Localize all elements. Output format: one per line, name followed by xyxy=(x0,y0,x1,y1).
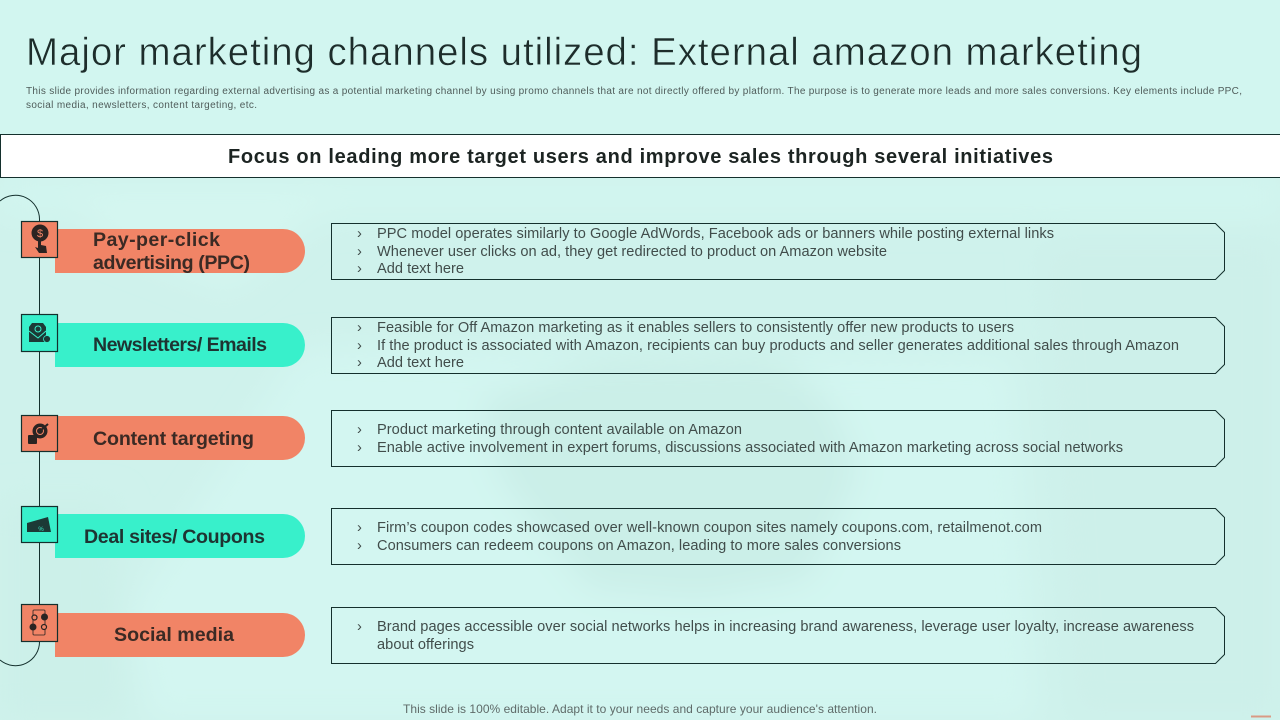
text box: Content targeting: › xyxy=(357,422,362,438)
text box: Newsletters: If the product is associated with Amazon, recipients can buy products and seller generates additional sales through Amazon xyxy=(377,338,1179,354)
icon: target with dart xyxy=(22,416,58,452)
pill: Deal sites xyxy=(55,514,305,558)
text box: Content targeting: › xyxy=(357,440,362,456)
text box: Newsletters: › xyxy=(357,355,362,371)
description: This slide provides information regarding external advertising as a potential marketing channel by using promo channels that are not directly offered by platform. The purpose is to generate more leads and more sales conversions. Key elements include PPC, xyxy=(26,86,1242,97)
text box: Social media xyxy=(332,608,1224,664)
text box: Newsletters: › xyxy=(357,338,362,354)
text box: Content targeting: Product marketing through content available on Amazon xyxy=(377,422,742,438)
description: social media, newsletters, content targeting, etc. xyxy=(26,100,257,111)
pill: PPC xyxy=(55,229,305,274)
text box: Newsletters xyxy=(332,318,1224,374)
pill: Social media xyxy=(55,613,305,657)
pill: Content targeting: Content targeting xyxy=(93,428,254,450)
text box: PPC: › xyxy=(357,261,362,277)
icon: dollar coin and pointing hand xyxy=(22,222,58,258)
text box: Deal sites: Firm’s coupon codes showcased over well-known coupon sites namely coupons.com, retailmenot.com xyxy=(377,520,1042,536)
pill: Social media: Social media xyxy=(114,624,235,646)
text box: PPC: Whenever user clicks on ad, they get redirected to product on Amazon website xyxy=(377,244,887,260)
pill: PPC: Pay-per-click xyxy=(93,229,220,251)
description xyxy=(26,86,1242,111)
icon: dollar coin and pointing hand: $ xyxy=(37,228,43,240)
footer note: This slide is 100% editable. Adapt it to your needs and capture your audience's attention. xyxy=(403,702,877,716)
item: Social media xyxy=(22,604,1224,664)
text box: PPC: Add text here xyxy=(377,261,464,277)
icon: coupon tickets: % xyxy=(38,527,44,533)
title: Major marketing channels utilized: External amazon marketing xyxy=(26,31,1142,74)
text box: PPC: › xyxy=(357,226,362,242)
text box: Deal sites xyxy=(332,508,1224,564)
banner: Focus on leading more target users and improve sales through several initiatives xyxy=(228,146,1053,168)
timeline line xyxy=(0,195,40,666)
text box: PPC: PPC model operates similarly to Google AdWords, Facebook ads or banners while posting external links xyxy=(377,226,1054,242)
text box: Deal sites: › xyxy=(357,520,362,536)
text box: Newsletters: Feasible for Off Amazon marketing as it enables sellers to consistently offer new products to users xyxy=(377,320,1014,336)
text box: Social media: about offerings xyxy=(377,637,474,653)
icon: email envelope xyxy=(22,314,58,352)
text box: Content targeting xyxy=(332,410,1224,466)
text box: Newsletters: › xyxy=(357,320,362,336)
item: Content targeting xyxy=(22,410,1224,466)
pill: Newsletters: Newsletters/ Emails xyxy=(93,334,267,356)
item: Deal sites xyxy=(22,506,1224,564)
text box: PPC xyxy=(332,224,1224,280)
banner xyxy=(0,134,1280,178)
text box: Deal sites: › xyxy=(357,538,362,554)
page marker xyxy=(1251,716,1271,718)
text box: PPC: › xyxy=(357,244,362,260)
pill: Content targeting xyxy=(55,416,305,460)
icon: phone with social network badges xyxy=(22,604,58,642)
pill: Newsletters xyxy=(55,323,305,367)
text box: Deal sites: Consumers can redeem coupons on Amazon, leading to more sales conversions xyxy=(377,538,901,554)
pill: PPC: advertising (PPC) xyxy=(93,252,250,274)
item: Pay-per-click advertising xyxy=(22,222,1224,280)
item: Newsletters xyxy=(22,314,1224,374)
icon: coupon tickets xyxy=(22,506,58,542)
text box: Social media: Brand pages accessible over social networks helps in increasing brand awareness, leverage user loyalty, increase awareness xyxy=(377,619,1194,635)
pill: Deal sites: Deal sites/ Coupons xyxy=(84,526,265,548)
text box: Content targeting: Enable active involvement in expert forums, discussions associated with Amazon marketing across social networks xyxy=(377,440,1123,456)
text box: Social media: › xyxy=(357,619,362,635)
text box: Newsletters: Add text here xyxy=(377,355,464,371)
